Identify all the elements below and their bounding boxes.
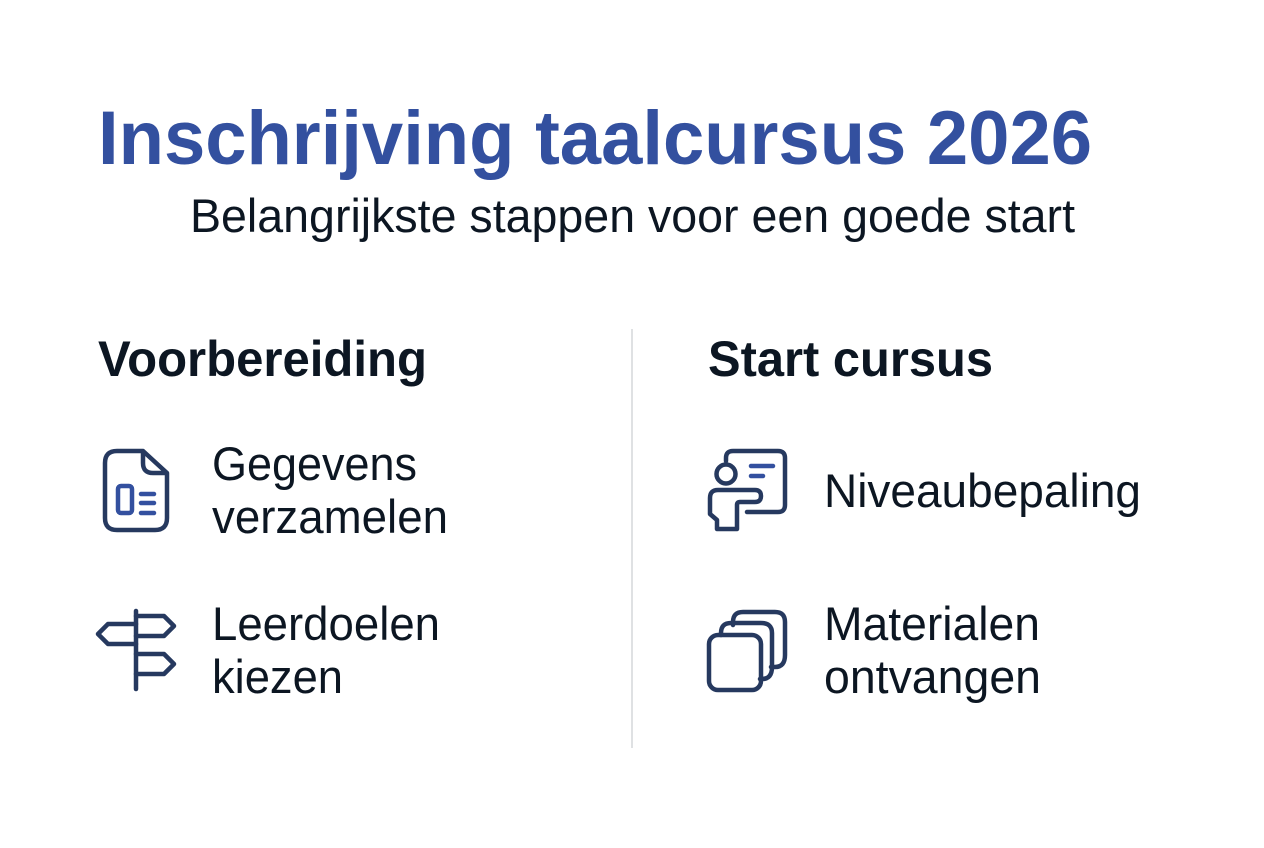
icon: person at board (710, 451, 785, 529)
text: Materialen ontvangen (824, 597, 1041, 703)
text: Leerdoelen kiezen: Leerdoelen (212, 597, 440, 650)
heading: Start cursus: Start cursus (708, 331, 993, 387)
panel: Start cursus (708, 331, 1141, 703)
text: Gegevens verzamelen (212, 437, 448, 543)
text: Leerdoelen kiezen: kiezen (212, 650, 343, 703)
divider (631, 329, 633, 748)
text: Leerdoelen kiezen (212, 597, 440, 703)
text: Materialen ontvangen: ontvangen (824, 650, 1041, 703)
text: Gegevens verzamelen: verzamelen (212, 490, 448, 543)
text: Gegevens verzamelen: Gegevens (212, 437, 417, 490)
icon: document (105, 451, 167, 530)
icon: signpost (98, 611, 174, 689)
title: Inschrijving taalcursus 2026 (98, 96, 1092, 181)
text: Niveaubepaling: Niveaubepaling (824, 464, 1141, 517)
icon: stacked squares (709, 612, 785, 690)
subtitle: Belangrijkste stappen voor een goede start (190, 189, 1075, 242)
panel: Voorbereiding (98, 331, 448, 703)
heading: Voorbereiding: Voorbereiding (98, 331, 427, 387)
text: Materialen ontvangen: Materialen (824, 597, 1040, 650)
